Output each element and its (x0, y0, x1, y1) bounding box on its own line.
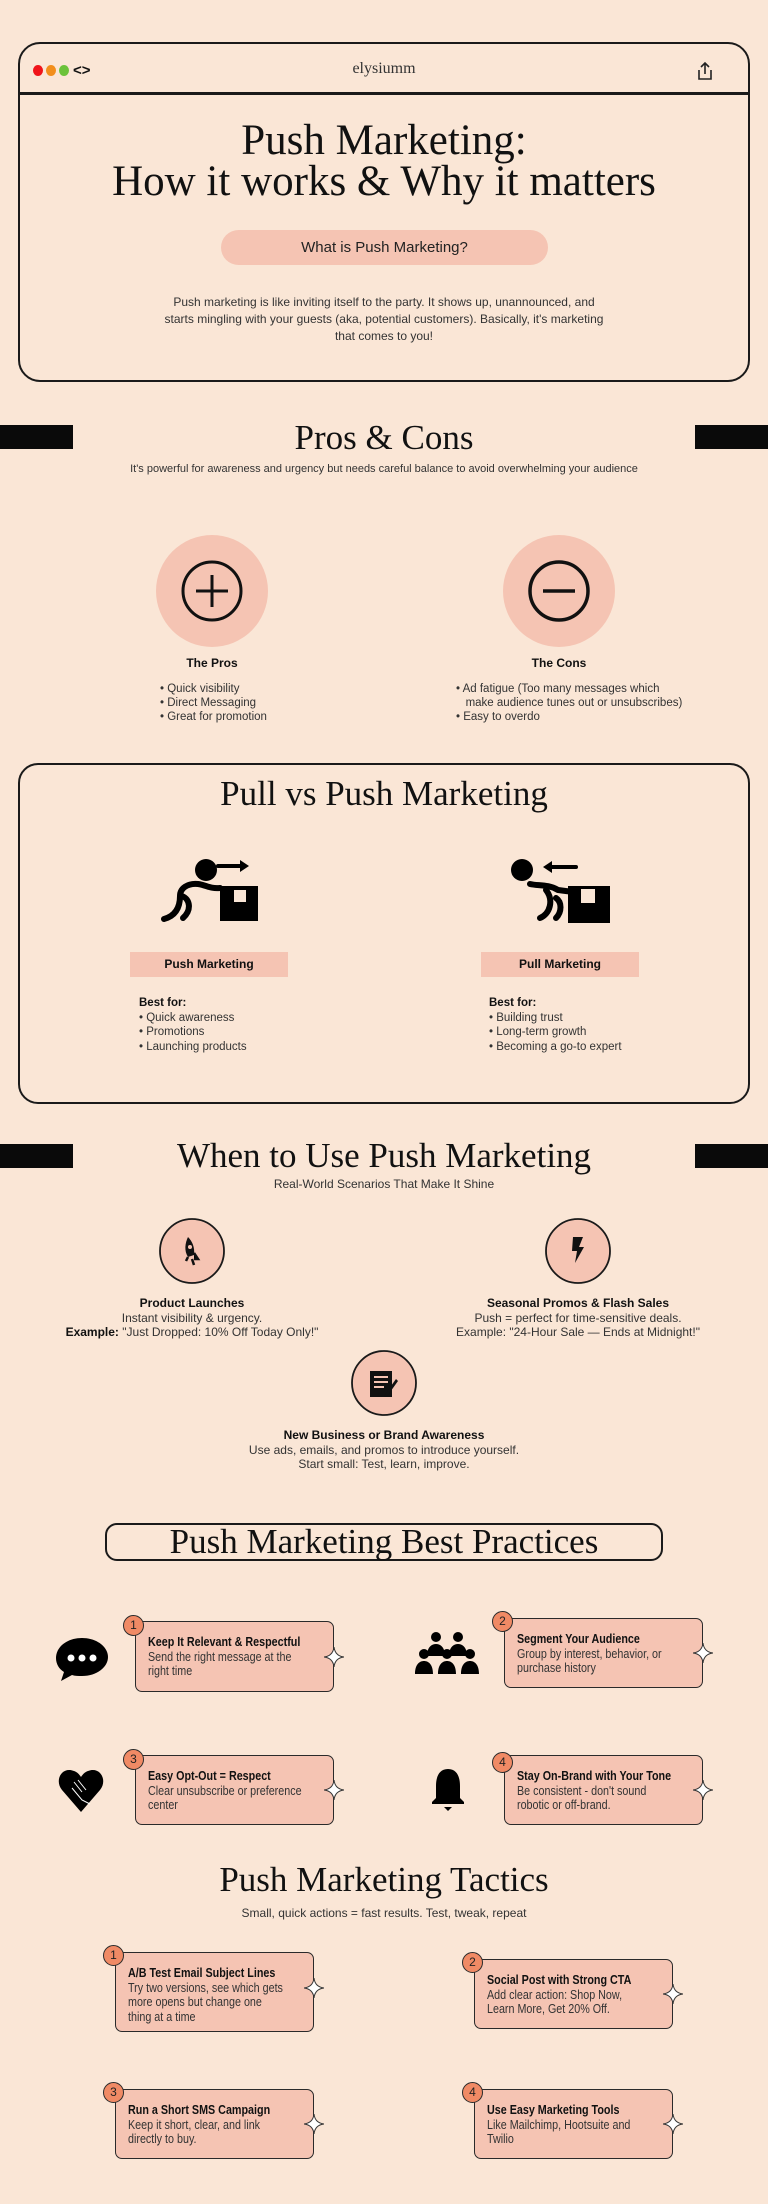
card: tactic 4: Twilio (487, 2132, 514, 2146)
title: Push Marketing: (241, 117, 527, 164)
window dots: <> (73, 62, 91, 79)
logo: elysiumm (352, 60, 416, 77)
subtitle: It's powerful for awareness and urgency but needs careful balance to avoid overwhelming your audience (130, 463, 638, 475)
panel: pros: The Pros (186, 656, 238, 670)
card: tactic 1: A/B Test Email Subject Lines (128, 1966, 275, 1980)
card: practice 4: Be consistent - don't sound (517, 1784, 646, 1798)
list: pull best for: • Building trust (489, 1012, 563, 1024)
icon: rocket (159, 1218, 225, 1284)
card: tactic 3: Run a Short SMS Campaign (128, 2103, 270, 2117)
pill: what is push marketing (221, 230, 548, 265)
icon: star (693, 1643, 713, 1663)
icon: pull (511, 859, 610, 923)
scenario: product launches: Product Launches (140, 1296, 244, 1310)
card: tactic 4: Like Mailchimp, Hootsuite and (487, 2118, 630, 2132)
scenario: product launches (66, 1218, 318, 1339)
icon: heart hands (58, 1770, 104, 1812)
window dots (33, 62, 91, 79)
icon: minus (503, 535, 615, 647)
list: pull best for: Best for: (489, 997, 536, 1009)
icon: star (304, 2114, 324, 2134)
title (112, 117, 656, 205)
list: push best for: • Quick awareness (139, 1012, 234, 1024)
card: practice 1: right time (148, 1664, 192, 1678)
card: practice 3: Easy Opt-Out = Respect (148, 1769, 271, 1783)
intro text: Push marketing is like inviting itself to the party. It shows up, unannounced, and (173, 295, 595, 309)
icon: push (161, 859, 258, 922)
ribbon: pull marketing (481, 952, 639, 977)
scenario: new business: Start small: Test, learn, improve. (298, 1457, 470, 1471)
badge 4: 4 (499, 1755, 506, 1769)
pill: what is push marketing: What is Push Marketing? (301, 239, 468, 256)
badge 1: 1 (110, 1948, 117, 1962)
heading: Pull vs Push Marketing (220, 774, 548, 813)
icon: star (324, 1780, 344, 1800)
tape left (0, 1144, 73, 1168)
badge 1 (123, 1615, 144, 1636)
tape right (695, 425, 768, 449)
icon: star (663, 1984, 683, 2004)
card: tactic 3: directly to buy. (128, 2132, 197, 2146)
card: tactic 2: Learn More, Get 20% Off. (487, 2002, 610, 2016)
card: practice 2: purchase history (517, 1661, 596, 1675)
icon: star (324, 1647, 344, 1667)
ribbon: push marketing (130, 952, 288, 977)
title: How it works & Why it matters (112, 158, 656, 205)
card: practice 4 (504, 1755, 703, 1825)
card: tactic 1: Try two versions, see which gets (128, 1980, 283, 1994)
badge 3 (123, 1749, 144, 1770)
scenario: new business (249, 1350, 519, 1471)
list: push best for: • Launching products (139, 1040, 247, 1052)
scenario: seasonal promos: Seasonal Promos & Flash Sales (487, 1296, 669, 1310)
icon: chat bubble (56, 1638, 108, 1681)
panel: cons: make audience tunes out or unsubscribes) (466, 697, 682, 709)
scenario: new business: Use ads, emails, and promos to introduce yourself. (249, 1442, 519, 1456)
icon: bell (432, 1769, 464, 1811)
card: practice 1: Keep It Relevant & Respectful (148, 1635, 300, 1649)
panel: pros: Direct Messaging (167, 697, 256, 709)
card: practice 1: Send the right message at the (148, 1650, 291, 1664)
card: tactic 2: Social Post with Strong CTA (487, 1973, 631, 1987)
ribbon: pull marketing: Pull Marketing (519, 957, 601, 971)
badge 1 (103, 1945, 124, 1966)
panel: cons (456, 535, 682, 723)
card: tactic 1 (115, 1952, 314, 2032)
scenario: seasonal promos: Example: "24-Hour Sale — Ends at Midnight!" (456, 1325, 700, 1339)
subtitle: Real-World Scenarios That Make It Shine (274, 1177, 494, 1191)
card: practice 3: Clear unsubscribe or preference (148, 1784, 302, 1798)
card: practice 2 (504, 1618, 703, 1688)
scenario: product launches: Instant visibility & urgency. (122, 1310, 262, 1324)
browser frame (18, 42, 750, 382)
card: practice 3: center (148, 1798, 178, 1812)
card: practice 1 (135, 1621, 334, 1692)
card: tactic 4: Use Easy Marketing Tools (487, 2103, 619, 2117)
card: tactic 4 (474, 2089, 673, 2159)
ribbon: push marketing: Push Marketing (164, 957, 254, 971)
list: push best for (139, 997, 247, 1052)
heading pill: best practices: Push Marketing Best Practices (170, 1522, 598, 1561)
icon: people group (415, 1632, 479, 1674)
card: practice 2: Segment Your Audience (517, 1632, 640, 1646)
intro text: starts mingling with your guests (aka, potential customers). Basically, it's marketing (165, 312, 603, 326)
badge 1: 1 (130, 1618, 137, 1632)
scenario: new business: New Business or Brand Awareness (284, 1428, 484, 1442)
badge 4 (492, 1752, 513, 1773)
card: practice 4: robotic or off-brand. (517, 1798, 611, 1812)
list: pull best for (489, 997, 622, 1052)
badge 2: 2 (469, 1955, 476, 1969)
badge 3: 3 (130, 1752, 137, 1766)
card: tactic 3 (115, 2089, 314, 2159)
icon: star (663, 2114, 683, 2134)
panel: cons: • Ad fatigue (Too many messages which (456, 683, 659, 695)
heading: when to use: When to Use Push Marketing (177, 1136, 591, 1175)
tape right (695, 1144, 768, 1168)
intro text (164, 295, 603, 343)
card: tactic 2 (474, 1959, 673, 2029)
card: tactic 3: Keep it short, clear, and link (128, 2118, 260, 2132)
list: push best for: • Promotions (139, 1026, 204, 1038)
badge 2 (462, 1952, 483, 1973)
badge 3: 3 (110, 2085, 117, 2099)
list: push best for: Best for: (139, 997, 186, 1009)
list: pull best for: • Becoming a go-to expert (489, 1040, 622, 1052)
badge 3 (103, 2082, 124, 2103)
badge 4: 4 (469, 2085, 476, 2099)
panel: pros: Great for promotion (167, 711, 267, 723)
scenario: product launches: Example: "Just Dropped: 10% Off Today Only!" (66, 1325, 318, 1339)
list: pull best for: • Long-term growth (489, 1026, 586, 1038)
card: practice 4: Stay On-Brand with Your Tone (517, 1769, 671, 1783)
tape left (0, 425, 73, 449)
icon: star (304, 1978, 324, 1998)
panel: cons: • Easy to overdo (456, 711, 540, 723)
icon: share (698, 62, 712, 80)
panel: pull vs push (18, 763, 750, 1104)
card: tactic 1: thing at a time (128, 2010, 196, 2024)
panel: pros: Quick visibility (167, 683, 239, 695)
heading: tactics: Push Marketing Tactics (219, 1860, 549, 1899)
badge 2: 2 (499, 1614, 506, 1628)
badge 4 (462, 2082, 483, 2103)
badge 2 (492, 1611, 513, 1632)
card: tactic 1: more opens but change one (128, 1995, 262, 2009)
scenario: seasonal promos: Push = perfect for time-sensitive deals. (474, 1310, 682, 1324)
icon: star (693, 1780, 713, 1800)
panel: cons: The Cons (532, 656, 586, 670)
subtitle: Small, quick actions = fast results. Test, tweak, repeat (242, 1906, 526, 1920)
card: practice 3 (135, 1755, 334, 1825)
card: tactic 2: Add clear action: Shop Now, (487, 1988, 622, 2002)
panel: pros (156, 535, 268, 723)
icon: notepad (351, 1350, 417, 1416)
card: practice 2: Group by interest, behavior, or (517, 1646, 662, 1660)
icon: lightning (545, 1218, 611, 1284)
icon: plus (156, 535, 268, 647)
scenario: seasonal promos (456, 1218, 700, 1339)
intro text: that comes to you! (335, 329, 433, 343)
heading: pros & cons: Pros & Cons (295, 418, 473, 457)
